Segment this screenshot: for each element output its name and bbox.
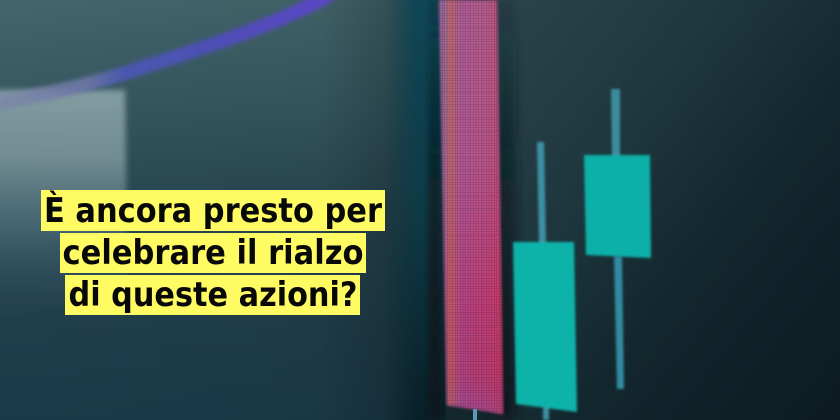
headline line 3: di queste azioni? [68,275,358,314]
red candlestick [439,0,503,420]
headline line 2: celebrare il rialzo [62,233,364,272]
teal candlestick, lower [513,142,577,420]
headline [41,190,385,315]
teal candlestick, upper [584,89,651,389]
headline line 1: È ancora presto per [44,190,382,230]
purple trend line [0,0,330,104]
light glow at left [0,90,128,330]
